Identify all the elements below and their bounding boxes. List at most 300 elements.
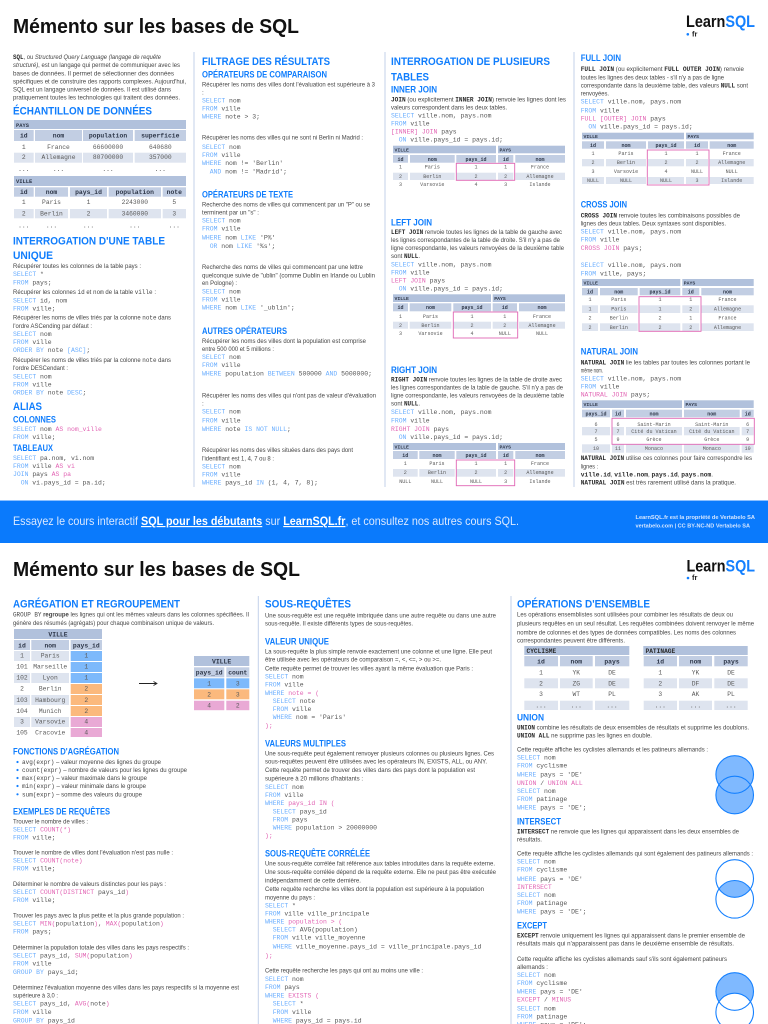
table: pays: ... (102, 166, 114, 173)
text and code: intersect: SELECT nom (517, 892, 556, 899)
code: alias de colonne (13, 426, 102, 441)
description: full join: correspondante dans la deuxième table, des valeurs NULL sont (581, 82, 748, 89)
subheading: opérateurs de comparaison: OPÉRATEURS DE COMPARAISON (202, 68, 327, 79)
description: cross join: CROSS JOIN renvoie toutes les combinaisons possibles de (581, 213, 740, 220)
text and code: exemples: Trouver les pays avec la plus petite et la plus grande population : (13, 912, 184, 919)
table: cyclisme: id (537, 658, 545, 665)
table: cyclisme: ... (535, 702, 547, 709)
subheading: left join: LEFT JOIN (391, 216, 432, 227)
table: ville group by result: 4 (207, 703, 211, 710)
table: résultat inner join: pays_id (465, 157, 487, 163)
text and code: texte: FROM ville (202, 296, 241, 303)
heading: interrogation de plusieurs tables: TABLES (391, 71, 429, 83)
table: pays: ... (155, 166, 166, 173)
table: ville group by source: 4 (84, 718, 88, 725)
table: résultat right join (393, 443, 565, 486)
table: résultat natural join: VILLE (584, 402, 598, 408)
note: natural join: ville.id, ville.nom, pays.id, pays.nom. (581, 471, 713, 478)
table: cyclisme: DE (608, 680, 616, 687)
text and code: except: SELECT nom (517, 1005, 556, 1012)
list: fonctions d'agrégation: sum(expr) – somme des valeurs du groupe (22, 791, 142, 798)
text and code: texte: SELECT nom (202, 288, 241, 295)
text and code: valeur unique: SELECT note (273, 698, 315, 705)
text and code: except: résultats mais qui n'apparaissent pas dans le deuxième ensemble de résultats. (517, 941, 734, 948)
code: alias de table: FROM ville AS vi (13, 463, 75, 470)
text and code: except: EXCEPT renvoie uniquement les lignes qui apparaissent dans le premier ensemble de (517, 933, 745, 940)
code: natural join (581, 375, 681, 399)
text and code: comparaison: FROM ville (202, 105, 241, 112)
table: ville group by source: 1 (84, 675, 88, 682)
table: ville: 1 (22, 199, 26, 206)
text and code: intersect: INTERSECT ne renvoie que les lignes qui apparaissent dans les deux ensembles de (517, 828, 739, 835)
table: résultat natural join: Cité du Vatican (689, 429, 735, 435)
heading: interrogation de plusieurs tables: INTERROGATION DE PLUSIEURS (391, 56, 550, 68)
table: ville: 3 (172, 210, 176, 218)
text and code: comparaison: Récupérer les noms des villes dont l'évaluation est supérieure à 3 (202, 81, 375, 88)
panel: introduction: spécifiques et de construire des rapports complexes. Aujourd'hui, (13, 78, 186, 85)
text and code: valeurs multiples: FROM ville (265, 792, 304, 799)
table: résultat full join: 2 (591, 160, 595, 166)
text and code: sous-requête corrélée: FROM ville (273, 1009, 311, 1016)
table: résultat inner join: PAYS (500, 147, 511, 153)
text and code: valeur unique: SELECT nom (265, 674, 304, 681)
icon: venn diagram except (716, 973, 754, 1024)
table: résultat right join: NULL (431, 479, 443, 485)
icon: venn diagram union (716, 756, 754, 814)
text and code: autres opérateurs: FROM ville (202, 471, 241, 478)
code: inner join: SELECT ville.nom, pays.nom (391, 113, 492, 120)
table: résultat cross join: 1 (689, 316, 692, 322)
text and code: exemples: FROM pays; (13, 929, 52, 936)
heading: opérations d'ensemble: OPÉRATIONS D'ENSEMBLE (517, 598, 650, 611)
code: cross join: SELECT ville.nom, pays.nom (581, 262, 681, 269)
table: résultat natural join: 9 (616, 437, 620, 443)
code: inner join: ON ville.pays_id = pays.id; (399, 137, 503, 144)
table: ville: nom (46, 189, 57, 196)
panel: cross join (581, 199, 754, 331)
table: patinage: PL (727, 691, 735, 698)
table: résultat cross join (582, 279, 754, 331)
table: résultat full join: PAYS (688, 134, 699, 140)
table: résultat cross join: pays_id (649, 290, 671, 296)
text and code: sous-requête corrélée: WHERE ville_moyenne.pays_id = ville_principale.pays_id (273, 944, 481, 951)
description: inner join: JOIN (ou explicitement INNER JOIN) renvoie les lignes dont les (391, 96, 566, 103)
subheading: sous-requête corrélée: SOUS-REQUÊTE CORRÉLÉE (265, 848, 370, 859)
table: patinage: id (656, 658, 664, 665)
table: résultat natural join: 6 (594, 422, 598, 428)
logo: page 2: LearnSQL (686, 557, 755, 576)
description: right join: sont NULL. (391, 401, 420, 408)
text and code: valeurs multiples: WHERE population > 20000000 (273, 824, 377, 831)
table: ville: 3460000 (122, 210, 148, 218)
panel: introduction: SQL est un langage universel de données. Il est utilisé dans (13, 86, 171, 93)
text and code: exemples: GROUP BY pays_id; (13, 969, 79, 976)
table: pays: 640680 (149, 144, 172, 151)
note: natural join: lignes : (581, 463, 598, 470)
table: résultat full join: pays_id (655, 143, 677, 149)
table: résultat natural join: 7 (594, 429, 598, 435)
text and code: sous-requête corrélée: Cette requête recherche les pays qui ont au moins une ville : (265, 968, 423, 975)
text and code: comparaison: WHERE note > 3; (202, 113, 260, 120)
description: left join (391, 229, 564, 260)
text and code: exemples: FROM ville; (13, 897, 56, 904)
text and code: sous-requête corrélée: Une sous-requête corrélée fait référence aux tables introduites dans la requête externe. (265, 861, 495, 868)
text and code: autres opérateurs: entre 500 000 et 5 millions : (202, 346, 274, 353)
table: résultat inner join: 4 (474, 182, 478, 188)
table: résultat full join: NULL (726, 169, 738, 175)
code: full join: SELECT ville.nom, pays.nom (581, 99, 681, 106)
table: patinage: 1 (658, 670, 662, 676)
text and code: exemples: SELECT COUNT(DISTINCT pays_id) (13, 889, 129, 896)
text and code: autres opérateurs: Récupérer les noms des villes situées dans des pays dont (202, 447, 353, 454)
text and code: except: WHERE pays = 'DE' (517, 988, 583, 995)
text and code: intersect: FROM patinage (517, 900, 567, 907)
table: résultat natural join: 11 (615, 446, 621, 452)
subheading: opérateurs de texte: OPÉRATEURS DE TEXTE (202, 188, 293, 199)
table: patinage: AK (692, 691, 699, 698)
text and code: autres opérateurs: WHERE population BETWEEN 500000 AND 5000000; (202, 370, 372, 377)
code: right join: FROM ville (391, 417, 430, 424)
text and code: valeurs multiples: SELECT pays_id (273, 808, 327, 815)
table: résultat right join: 2 (504, 470, 507, 476)
text and code: comparaison: : (202, 89, 204, 96)
table: ville: note (167, 189, 182, 196)
text and code: requêtes sur une table: FROM ville (13, 339, 52, 346)
description: left join: LEFT JOIN renvoie toutes les lignes de la table de gauche avec (391, 229, 563, 236)
text and code: requêtes sur une table: FROM ville (13, 381, 52, 388)
table: résultat right join: nom (432, 453, 442, 459)
text and code: texte (202, 201, 375, 312)
table: résultat natural join: 7 (616, 429, 620, 435)
text and code: sous-requête corrélée: FROM pays (265, 984, 300, 991)
code: alias de table (13, 455, 106, 486)
table: résultat full join: 2 (695, 160, 699, 166)
table: ville: 2 (87, 210, 91, 218)
text and code: requêtes sur une table: l'ordre ASCending par défaut : (13, 323, 92, 330)
description: left join: ligne correspondante, les valeurs renvoyées de la deuxième table (391, 245, 564, 252)
code: alias de colonne: FROM ville; (13, 434, 56, 441)
description: full join (581, 66, 748, 98)
text and code: sous-requête corrélée: FROM ville ville_principale (265, 910, 369, 917)
text and code: exemples: SELECT COUNT(note) (13, 858, 83, 865)
code: left join (391, 261, 503, 292)
table: résultat left join (393, 294, 565, 338)
text and code: exemples: SELECT MIN(population), MAX(population) (13, 920, 164, 927)
table: résultat full join: 4 (664, 169, 668, 175)
table: résultat cross join: Paris (611, 297, 626, 303)
table: ville group by source: 101 (16, 664, 28, 670)
table: cyclisme: 1 (539, 670, 543, 676)
code: full join: ON ville.pays_id = pays.id; (588, 124, 693, 131)
table: résultat right join: Berlin (428, 470, 446, 476)
heading: interrogation d'une table unique: UNIQUE (13, 250, 53, 262)
text and code: requêtes sur une table: FROM ville; (13, 306, 56, 312)
table: ville group by source: Marseille (33, 664, 67, 670)
title: Mémento sur les bases de SQL (13, 15, 299, 38)
text and code: intersect: SELECT nom (517, 859, 556, 866)
text and code: exemples: SELECT COUNT(*) (13, 826, 71, 833)
table: résultat inner join: 1 (474, 165, 478, 171)
text and code: valeurs multiples: FROM pays (273, 816, 308, 823)
table: résultat inner join (393, 146, 565, 188)
table: résultat natural join: 10 (745, 446, 751, 452)
table: résultat natural join: 10 (593, 446, 599, 452)
description: right join: RIGHT JOIN renvoie toutes les lignes de la table de droite avec (391, 377, 563, 384)
text and code: exemples: Déterminer la population totale des villes dans les pays respectifs : (13, 945, 189, 952)
text and code: texte: en Pologne) : (202, 280, 237, 287)
text and code: autres opérateurs: SELECT nom (202, 463, 241, 470)
heading: interrogation de plusieurs tables (391, 56, 550, 83)
text and code: valeur unique: FROM ville (265, 682, 304, 689)
text and code: texte: FROM ville (202, 226, 241, 233)
table: ville group by result (194, 656, 249, 710)
text and code: valeur unique: FROM ville (273, 706, 311, 713)
text and code: sous-requête corrélée: ); (265, 952, 273, 959)
table: patinage: DE (727, 680, 735, 687)
table: résultat left join: Paris (423, 314, 438, 320)
table: cyclisme: nom (571, 658, 582, 665)
subheading: valeur unique: VALEUR UNIQUE (265, 635, 329, 646)
table: résultat natural join: id (615, 411, 621, 417)
table: résultat cross join: id (587, 290, 593, 296)
logo: LearnSQL (686, 12, 755, 31)
description: natural join (581, 359, 750, 374)
text and code: comparaison (202, 81, 375, 175)
table: résultat natural join: nom (707, 411, 716, 417)
text and code: union: WHERE pays = 'DE'; (517, 804, 587, 811)
table: ville (14, 176, 186, 230)
table: résultat inner join: Varsovie (420, 182, 444, 188)
table: résultat natural join: 5 (594, 437, 598, 443)
table: pays: ... (53, 166, 64, 173)
table: résultat natural join: id (745, 411, 751, 417)
code: natural join: FROM ville (581, 383, 619, 390)
table: ville: 2 (22, 210, 26, 218)
text and code: requêtes sur une table: Récupérer les noms de villes triés par la colonne note dans (13, 314, 171, 322)
subheading: valeurs multiples: VALEURS MULTIPLES (265, 737, 346, 748)
table: ville group by result: 1 (207, 680, 211, 688)
table: patinage: PATINAGE (646, 648, 675, 655)
text and code: except: FROM patinage (517, 1013, 567, 1020)
table: patinage (643, 646, 748, 710)
description: sous-requêtes: sous-requête. Il existe différents types de sous-requêtes. (265, 620, 413, 627)
logo: page 2: fr (692, 573, 697, 582)
text and code: valeurs multiples: Une sous-requête peut également renvoyer plusieurs colonnes ou plusieurs lignes. Ces (265, 751, 494, 758)
table: ville group by source: Varsovie (35, 718, 66, 725)
subheading: autres opérateurs: AUTRES OPÉRATEURS (202, 325, 287, 336)
table: résultat full join: nom (621, 143, 631, 149)
table: patinage: DE (727, 670, 735, 676)
table: résultat left join: Berlin (421, 323, 440, 329)
table: ville group by result: pays_id (196, 670, 223, 677)
table: résultat natural join: nom (649, 411, 659, 417)
text and code: union: UNION combine les résultats de deux ensembles de résultats et supprime les doublons. (517, 724, 749, 731)
footer banner (0, 500, 768, 543)
table: résultat cross join: id (688, 290, 694, 296)
table: résultat left join: Allemagne (528, 323, 556, 329)
table: ville group by source: Paris (41, 652, 60, 659)
table: résultat natural join: Monaco (645, 446, 663, 452)
table: pays: 1 (22, 144, 26, 151)
table: résultat inner join: 2 (399, 174, 402, 180)
table: pays: ... (18, 166, 29, 173)
table: résultat cross join: 2 (658, 316, 662, 322)
code: right join: ON ville.pays_id = pays.id; (399, 434, 503, 441)
heading: alias: ALIAS (13, 401, 42, 413)
table: cyclisme: ... (571, 702, 582, 709)
description: full join: FULL JOIN (ou explicitement FULL OUTER JOIN) renvoie (581, 66, 744, 73)
table: résultat natural join: Monaco (703, 446, 721, 452)
text and code: exemples: Déterminez l'évaluation moyenne des villes dans les pays respectifs si la moyenne est (13, 984, 239, 991)
text and code: exemples (13, 818, 239, 1024)
table: résultat cross join: Allemagne (714, 307, 741, 313)
table: ville: 1 (87, 199, 91, 206)
table: résultat right join: 3 (504, 479, 507, 485)
table: ville: pays_id (75, 189, 102, 196)
text and code: intersect (517, 828, 753, 915)
code: full join: FULL [OUTER] JOIN pays (581, 116, 666, 123)
description: left join: les lignes correspondantes de la table de droite. S'il n'y a pas de (391, 237, 560, 244)
text and code: requêtes sur une table: ORDER BY note DESC; (13, 390, 86, 396)
subheading: right join: RIGHT JOIN (391, 364, 437, 375)
code: inner join: FROM ville (391, 121, 430, 128)
table: résultat cross join: 1 (658, 307, 662, 313)
text and code: except: SELECT nom (517, 972, 556, 979)
table: ville group by source: Munich (39, 708, 62, 715)
code: cross join: CROSS JOIN pays; (581, 245, 643, 252)
text and code: exemples: Trouver le nombre de villes : (13, 818, 88, 825)
subheading: intersect: INTERSECT (517, 815, 561, 826)
table: ville group by result: VILLE (212, 658, 231, 665)
text and code: autres opérateurs: Récupérer les noms des villes dont la population est comprise (202, 338, 366, 345)
table: résultat inner join: VILLE (394, 147, 409, 153)
table: pays: 80700000 (93, 154, 123, 161)
code: right join: RIGHT JOIN pays (391, 426, 449, 433)
text and code: requêtes sur une table: SELECT nom (13, 331, 52, 338)
table: résultat natural join (582, 400, 754, 453)
table: pays: superficie (141, 133, 180, 140)
text and code: comparaison: Récupérer les noms des villes qui ne sont ni Berlin ni Madrid : (202, 135, 363, 142)
table: ville group by source: 102 (16, 675, 28, 682)
text and code: texte: WHERE nom LIKE '_ublin'; (202, 305, 295, 312)
table: résultat left join: VILLE (394, 296, 409, 302)
table: résultat cross join: Paris (611, 307, 626, 313)
text and code: autres opérateurs: FROM ville (202, 417, 241, 424)
table: résultat right join: pays_id (465, 453, 487, 459)
table: résultat right join: Allemagne (526, 470, 554, 476)
table: patinage: ... (725, 702, 737, 709)
table: résultat left join: nom (426, 305, 435, 311)
text and code: requêtes sur une table: l'ordre DESCendant : (13, 365, 68, 372)
panel: introduction: pratiquement toutes les technologies qui traitent des données. (13, 94, 180, 102)
text and code: autres opérateurs: SELECT nom (202, 354, 241, 361)
text and code: autres opérateurs: SELECT nom (202, 409, 241, 416)
text and code: exemples: Déterminer le nombre de valeurs distinctes pour les pays : (13, 881, 166, 888)
description: natural join: NATURAL JOIN lie les tables par toutes les colonnes portant le (581, 359, 750, 366)
table: ville group by source: 2 (84, 697, 88, 704)
table: résultat left join: NULL (536, 331, 548, 337)
table: résultat natural join: Cité du Vatican (631, 429, 677, 435)
table: résultat left join: pays_id (461, 305, 483, 311)
text and code: autres opérateurs: WHERE note IS NOT NULL; (202, 426, 291, 433)
text and code: exemples: FROM ville; (13, 866, 56, 873)
text and code: comparaison: SELECT nom (202, 97, 241, 104)
table: ville group by source: 1 (20, 652, 24, 659)
table: résultat right join: 1 (504, 461, 507, 467)
table: patinage: ... (690, 702, 701, 709)
table: cyclisme: WT (573, 691, 580, 698)
table: ville group by source: 3 (20, 718, 24, 725)
code: full join: FROM ville (581, 107, 619, 114)
text and code: except (517, 933, 745, 1024)
text and code: autres opérateurs: l'identifiant est 1, 4, 7 ou 8 : (202, 455, 274, 462)
text and code: sous-requête corrélée: SELECT * (265, 902, 296, 909)
subheading: exemples de requêtes: EXEMPLES DE REQUÊTES (13, 805, 110, 816)
table: patinage: nom (690, 658, 701, 665)
table: pays (14, 120, 186, 173)
table: résultat natural join: PAYS (686, 402, 697, 408)
text and code: valeur unique: WHERE nom = 'Paris' (273, 714, 346, 721)
code: natural join: NATURAL JOIN pays; (581, 392, 650, 399)
table: résultat natural join: 7 (746, 429, 749, 435)
table: résultat full join: id (590, 143, 596, 149)
text and code: valeurs multiples: SELECT nom (265, 784, 304, 791)
panel: full join (581, 52, 754, 185)
table: ville: VILLE (16, 179, 33, 185)
table: patinage: 2 (658, 680, 662, 687)
text and code: exemples: SELECT pays_id, AVG(note) (13, 1000, 110, 1007)
subheading: union: UNION (517, 711, 544, 722)
table: résultat right join: France (531, 461, 549, 467)
table: résultat inner join: 1 (504, 165, 507, 171)
text and code: union: SELECT nom (517, 788, 556, 795)
code: right join: SELECT ville.nom, pays.nom (391, 409, 492, 416)
table: ville group by source: pays_id (73, 642, 100, 649)
table: résultat right join: NULL (399, 479, 411, 485)
table: résultat cross join: 1 (588, 297, 592, 303)
table: résultat right join: 2 (474, 470, 478, 476)
text and code: texte: quelconque suivie de "ublin" (comme Dublin en Irlande ou Lublin (202, 272, 375, 279)
call to action: Essayez le cours interactif SQL pour les débutants sur LearnSQL.fr, et consultez nos autres cours SQL. (13, 515, 519, 528)
text and code: sous-requête corrélée: SELECT AVG(population) (273, 927, 358, 934)
table: cyclisme: 2 (539, 680, 543, 687)
subheading: cross join: CROSS JOIN (581, 199, 627, 210)
table: résultat full join: NULL (587, 178, 599, 184)
table: résultat full join: 1 (695, 151, 699, 157)
description: full join: renvoyées. (581, 91, 609, 98)
table: résultat right join: VILLE (394, 444, 409, 450)
table: pays: 357000 (149, 154, 172, 161)
text and code: sous-requête corrélée: SELECT * (273, 1000, 304, 1007)
table: résultat full join: 3 (695, 178, 699, 184)
subheading: colonnes: COLONNES (13, 414, 56, 425)
table: ville group by source: 103 (16, 697, 28, 704)
table: cyclisme: DE (608, 670, 616, 676)
table: ville: ... (46, 222, 57, 230)
table: ville group by source: Hambourg (35, 697, 66, 704)
table: résultat left join: nom (537, 305, 547, 311)
panel: inner join (391, 84, 566, 188)
table: ville: ... (83, 222, 94, 230)
table: résultat natural join: 6 (746, 422, 749, 428)
text and code: valeurs multiples: WHERE pays_id IN ( (265, 800, 335, 807)
table: cyclisme: 3 (539, 691, 543, 698)
text and code: sous-requête corrélée: SELECT nom (265, 976, 304, 983)
table: patinage: 3 (658, 691, 662, 698)
table: résultat inner join: id (503, 157, 509, 163)
text and code: except: Cette requête affiche les cyclistes allemands sauf s'ils sont également patineurs (517, 956, 727, 963)
table: résultat right join: PAYS (500, 444, 511, 450)
